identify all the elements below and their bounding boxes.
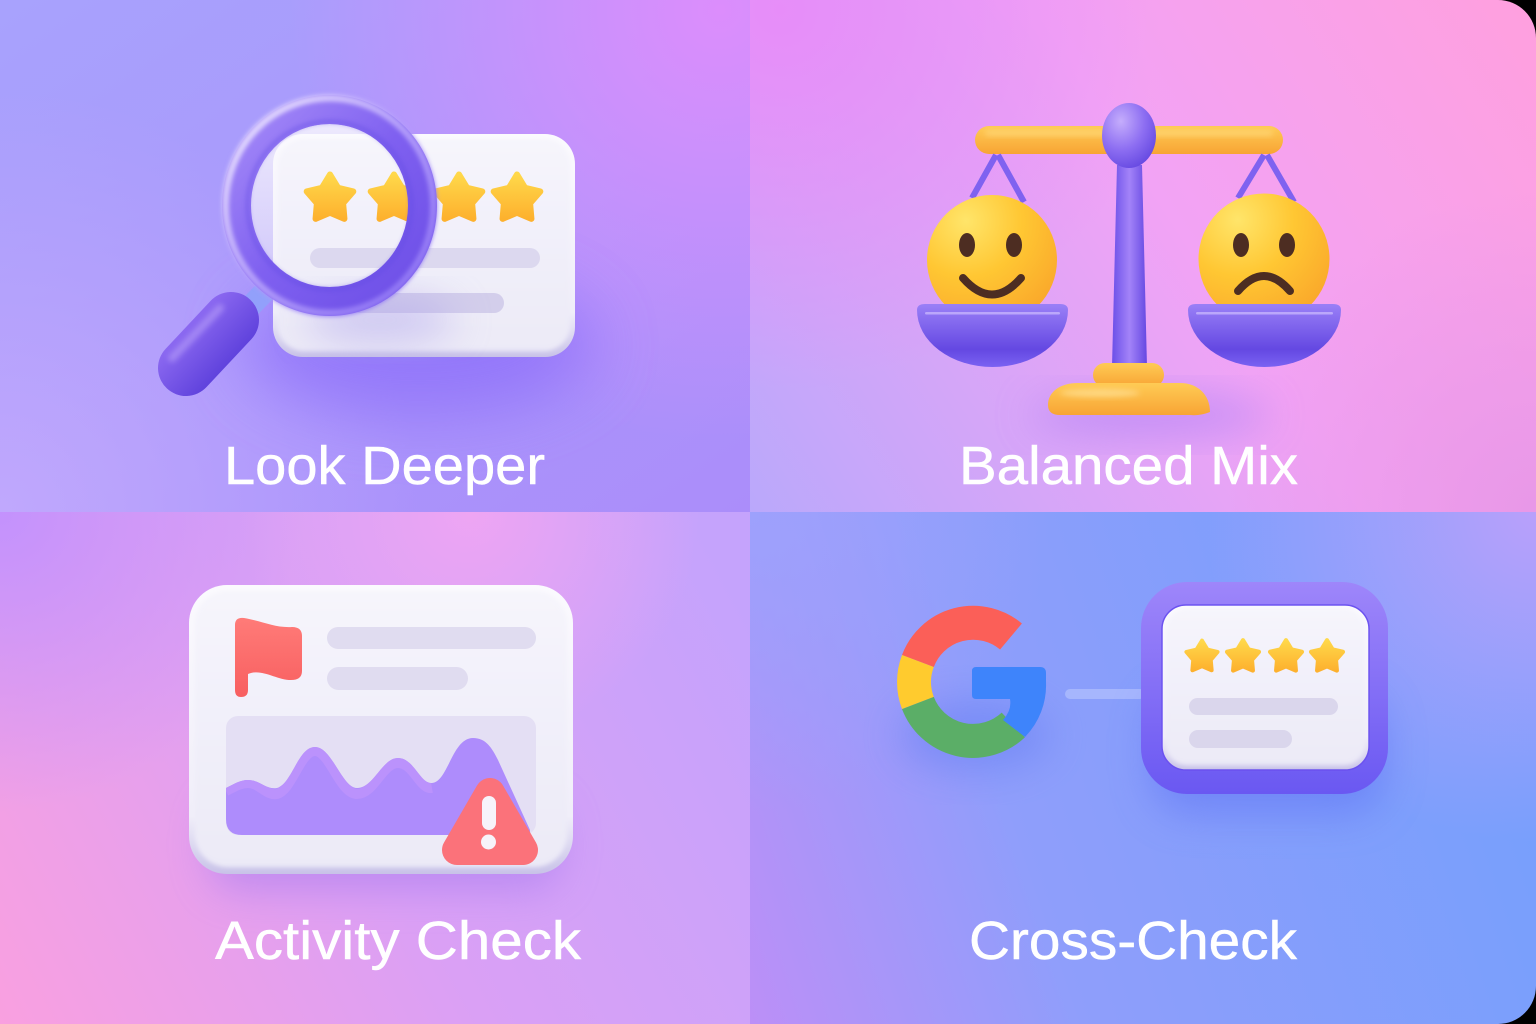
icon: framed review card [1141,582,1388,815]
star rating [307,175,540,219]
left bowl [917,304,1068,367]
icon: google G [900,623,1050,770]
panel: cross-check [750,512,1536,1024]
dashboard card [189,585,573,874]
scale beam [975,126,1283,154]
happy face [927,195,1057,304]
magnifier handle [172,284,272,368]
heading: Balanced Mix [959,436,1298,496]
warning triangle [457,793,523,850]
purple frame [1141,582,1388,794]
text placeholder lines [1189,698,1338,748]
heading: Cross-Check [969,911,1298,971]
lens glass [251,124,367,262]
heading: Activity Check [215,911,582,971]
magnifier ring [226,98,434,313]
activity area chart [226,716,536,835]
panel: balanced mix [750,0,1536,512]
scale post [1112,165,1147,367]
sad face [1198,194,1330,304]
heading: Look Deeper [224,436,545,496]
red flag [235,618,302,697]
connector line [1065,689,1145,699]
right strings [1238,155,1294,202]
review card [273,134,575,357]
review card [1162,605,1369,770]
panel: activity check [0,512,750,1024]
star rating [1186,640,1343,671]
icon: magnifier over review card [172,98,595,415]
left strings [972,155,1024,202]
scale pivot ball [1102,103,1156,168]
right bowl [1188,304,1341,367]
icon: activity dashboard card [189,585,573,890]
scale base [1048,363,1210,415]
panel: look deeper [0,0,750,512]
text placeholder lines [327,627,536,690]
icon: balance scale [917,103,1341,435]
